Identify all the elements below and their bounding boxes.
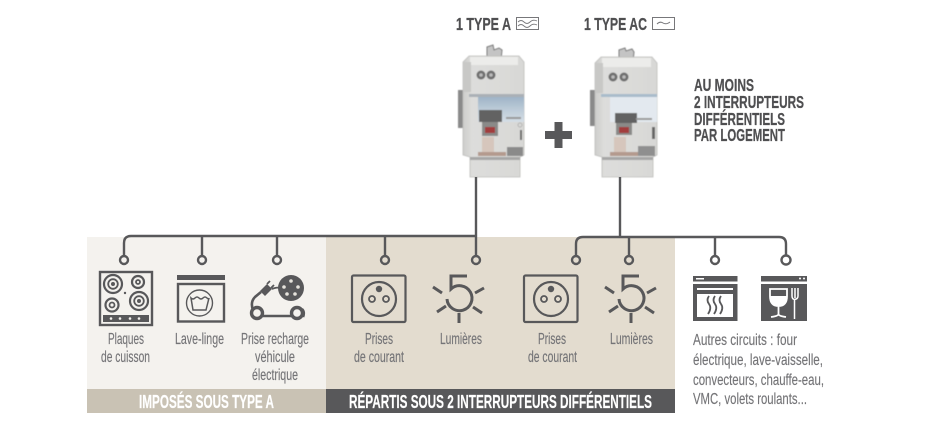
label: prises de courant 2: Prises <box>538 331 566 348</box>
note: au moins 2 interrupteurs: DIFFÉRENTIELS <box>694 108 785 129</box>
wiring: type A circuit <box>120 177 480 264</box>
text: autres circuits <box>693 332 824 408</box>
breaker: type A <box>458 45 524 177</box>
label: lumières 2: Lumières <box>610 331 653 348</box>
label: prise recharge véhicule électrique: véhicule <box>255 349 295 366</box>
label: plaques de cuisson: de cuisson <box>101 349 150 366</box>
label: prises de courant 1: Prises <box>365 331 393 348</box>
label: prises de courant 2: de courant <box>528 349 577 366</box>
icon: lave-vaisselle <box>761 276 807 321</box>
label: plaques de cuisson: Plaques <box>108 331 144 348</box>
label: prise recharge véhicule électrique: Prise recharge <box>241 331 309 348</box>
text: autres circuits: électrique, lave-vaisselle, <box>693 352 823 369</box>
icon: lumière 2 <box>605 276 656 323</box>
icon: prise de courant 1 <box>352 276 406 322</box>
band: imposés sous type A <box>87 389 326 413</box>
breaker: type AC <box>590 48 657 177</box>
note: au moins 2 interrupteurs: AU MOINS <box>694 75 754 95</box>
label: prise recharge véhicule électrique <box>241 331 309 384</box>
text: autres circuits: Autres circuits : four <box>693 332 797 349</box>
note: au moins 2 interrupteurs: 2 INTERRUPTEURS <box>694 92 804 112</box>
band: imposés sous type A: IMPOSÉS SOUS TYPE A <box>139 391 274 412</box>
heading: 1 type A: 1 TYPE A <box>456 14 511 34</box>
band: répartis sous 2 interrupteurs différentiels: RÉPARTIS SOUS 2 INTERRUPTEURS DIFFÉRENTIELS <box>349 391 652 412</box>
icon: four <box>693 276 738 321</box>
label: plaques de cuisson <box>101 331 150 366</box>
band: répartis sous 2 interrupteurs différentiels <box>326 389 675 413</box>
plus sign <box>545 122 572 148</box>
heading: 1 type AC: 1 TYPE AC <box>584 14 647 34</box>
icon: lumière 1 <box>433 276 484 323</box>
label: prise recharge véhicule électrique: électrique <box>252 367 298 384</box>
icon: prise de courant 2 <box>524 276 578 322</box>
label: prises de courant 1: de courant <box>354 349 404 366</box>
label: prises de courant 1 <box>354 331 404 366</box>
panel: répartis sous 2 interrupteurs <box>326 237 675 389</box>
icon: lave-linge <box>177 275 225 322</box>
label: prises de courant 2 <box>528 331 577 366</box>
label: lave-linge: Lave-linge <box>175 331 224 348</box>
text: autres circuits: convecteurs, chauffe-eau, <box>693 372 824 389</box>
wiring: type AC circuit <box>572 177 790 264</box>
icon: prise recharge véhicule électrique <box>252 275 304 318</box>
icon: plaques de cuisson <box>100 272 152 325</box>
label: lumières 1: Lumières <box>440 331 482 348</box>
text: autres circuits: VMC, volets roulants... <box>693 391 807 408</box>
note: au moins 2 interrupteurs: PAR LOGEMENT <box>694 125 785 145</box>
note: au moins 2 interrupteurs <box>694 75 804 145</box>
panel: imposés sous type A <box>87 237 326 389</box>
